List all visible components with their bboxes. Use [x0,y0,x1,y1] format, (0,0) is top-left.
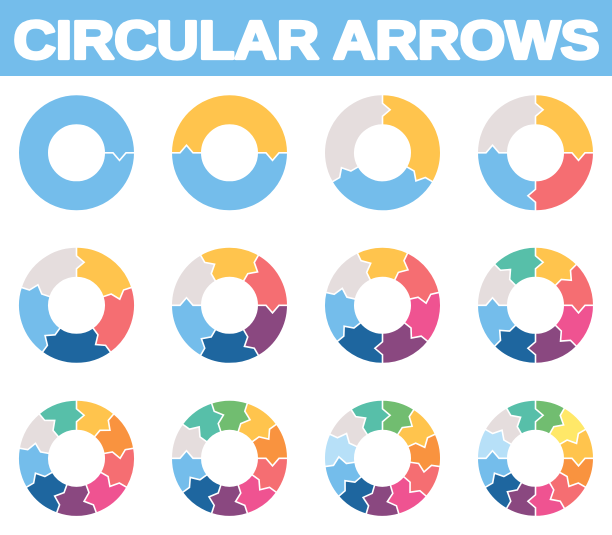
ring: 5 arrows [16,245,137,365]
ring: 7 arrows [322,245,443,366]
ring: 10 arrows [169,398,290,518]
title banner: CIRCULAR ARROWS [14,10,600,70]
ring: 4 arrows [476,94,594,212]
ring: 9 arrows [16,398,137,519]
ring: 6 arrows [170,247,288,364]
ring: 1 arrow [34,110,136,196]
ring: 2 arrows [170,110,288,196]
ring: 8 arrows [475,244,596,366]
title banner [0,0,612,76]
ring: 11 arrows [322,398,443,519]
ring: 3 arrows [324,94,441,212]
ring: 12 arrows [476,399,594,517]
